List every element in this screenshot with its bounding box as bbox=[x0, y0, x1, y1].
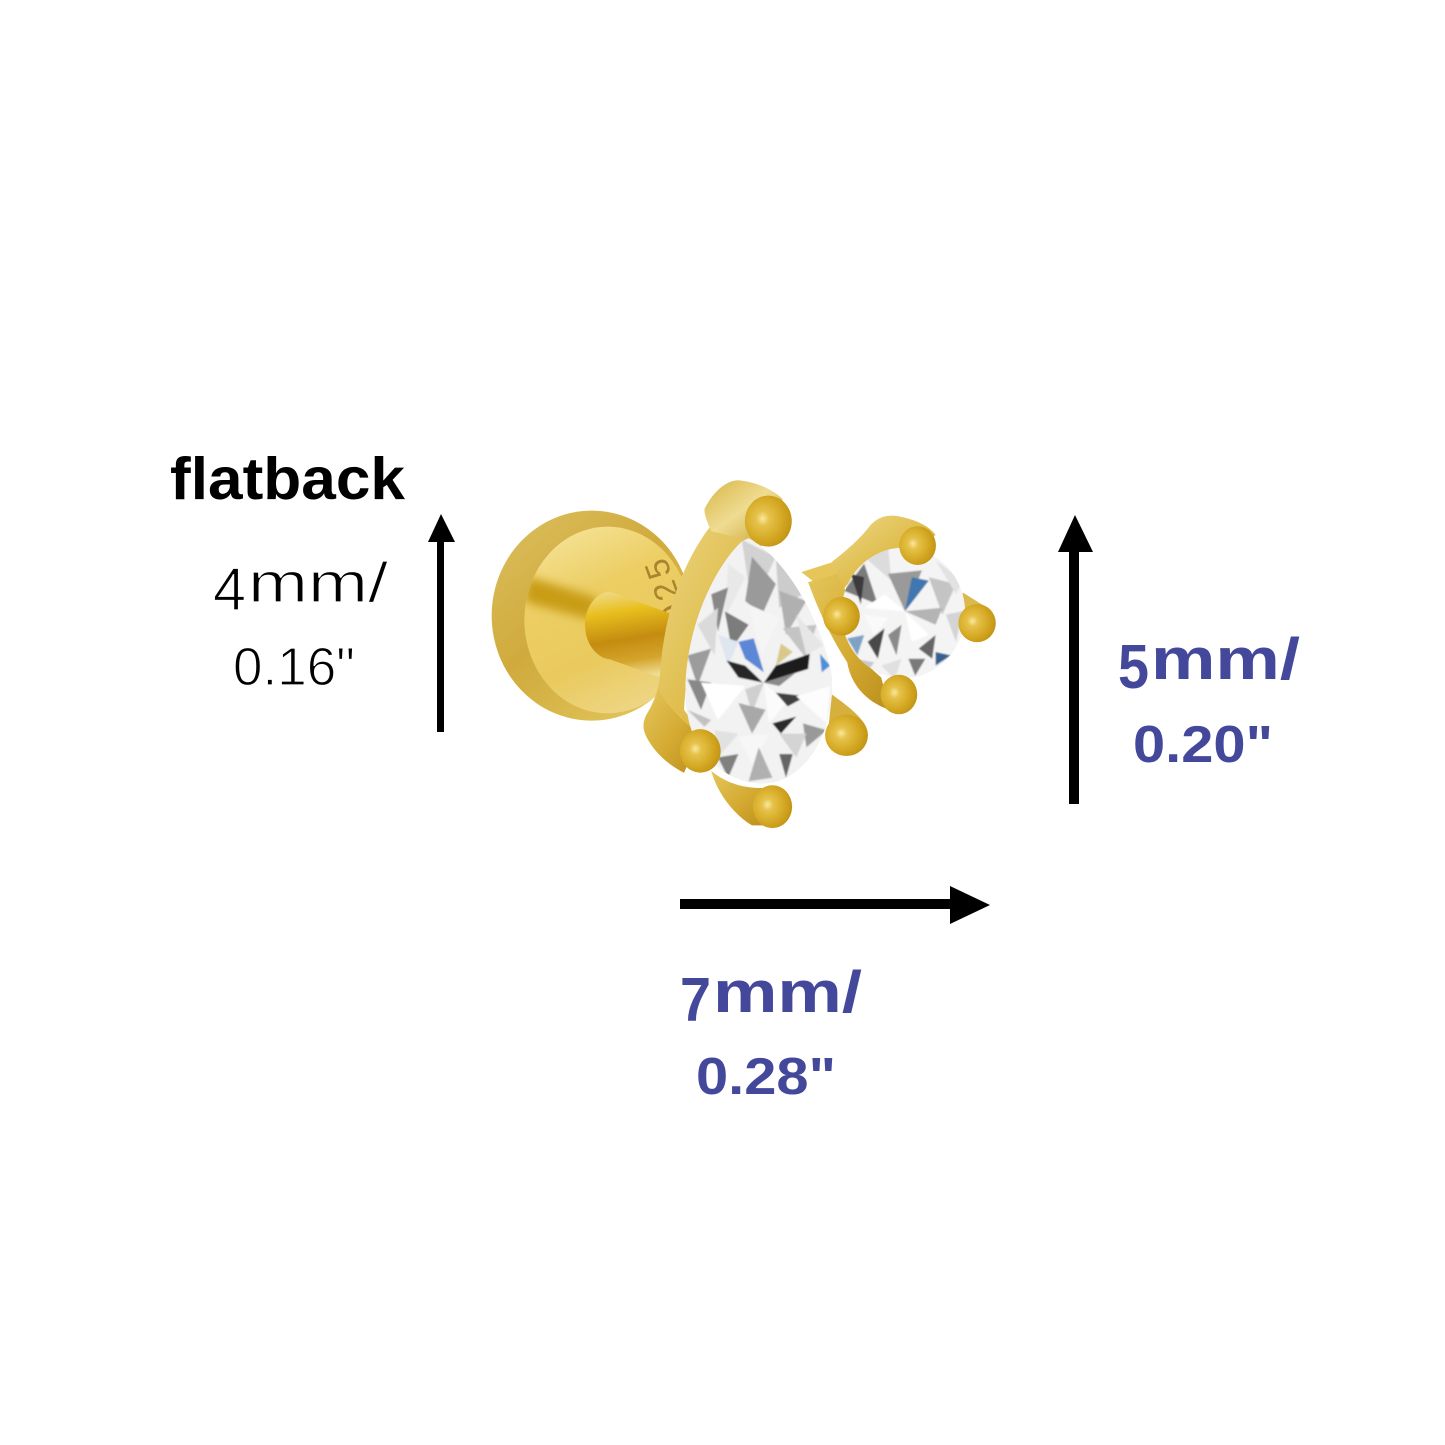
label: height: 0.20" bbox=[1133, 716, 1273, 774]
label: width: 7 bbox=[680, 966, 711, 1035]
label: flatback size: mm/ bbox=[248, 551, 388, 615]
product photo: setting and stones bbox=[644, 480, 996, 828]
disc rim bbox=[492, 511, 692, 721]
label: flatback size bbox=[213, 551, 388, 697]
lower right and bottom prong bases bbox=[827, 694, 864, 754]
top prong cap bbox=[704, 480, 783, 545]
arrow: flatback height bbox=[428, 514, 455, 732]
label: height: 5 bbox=[1118, 633, 1149, 702]
heading: flatback: flatback bbox=[170, 446, 405, 512]
arrow: width bbox=[680, 886, 990, 924]
label: width: 0.28" bbox=[696, 1048, 836, 1106]
label: flatback size: 4 bbox=[213, 556, 246, 623]
small stone setting bbox=[808, 516, 990, 710]
prong balls bbox=[680, 496, 996, 828]
label: flatback size: 0.16" bbox=[233, 637, 355, 697]
arrow: height bbox=[1058, 515, 1093, 804]
label: height: mm/ bbox=[1151, 627, 1300, 692]
reflection on disc bbox=[523, 577, 598, 620]
pear-cut stone bbox=[685, 538, 832, 784]
label: width: mm/ bbox=[713, 960, 862, 1025]
teardrop frame bbox=[644, 480, 783, 773]
disc face bbox=[524, 527, 691, 713]
label: height bbox=[1118, 627, 1300, 774]
lower flange bbox=[644, 689, 701, 773]
flatback disc and post bbox=[492, 511, 695, 721]
post bbox=[585, 592, 672, 677]
stamp: 925: 925 bbox=[637, 549, 695, 627]
small round stone bbox=[843, 548, 965, 678]
connector bar bbox=[801, 562, 846, 591]
label: width bbox=[680, 960, 862, 1106]
